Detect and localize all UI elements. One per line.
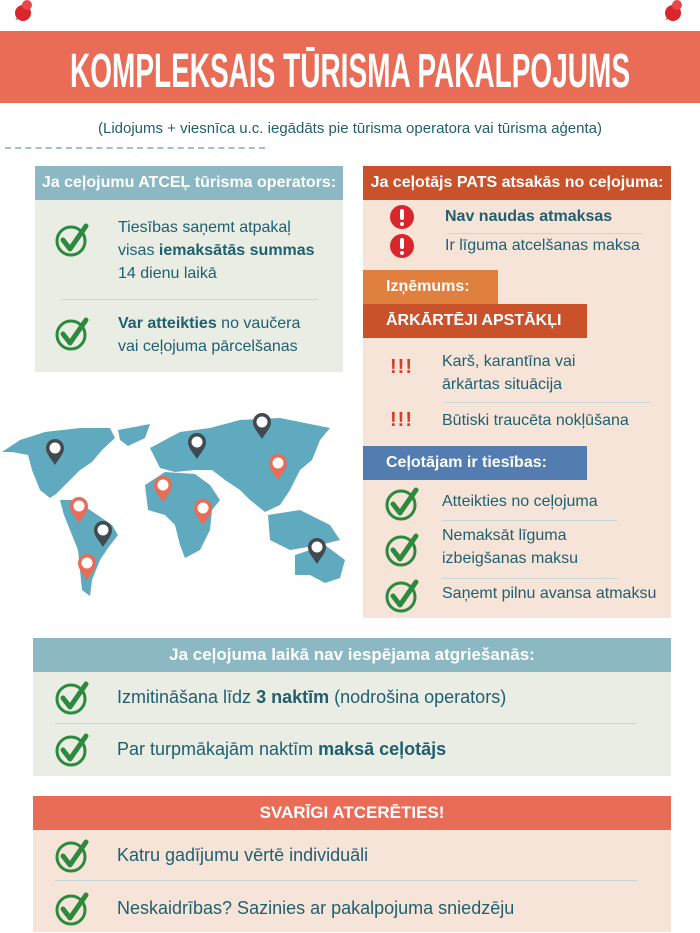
rights list: Atteikties no ceļojuma <box>442 493 598 510</box>
item: 3 nights <box>56 682 506 714</box>
item: no refund: Nav naudas atmaksas <box>445 208 612 225</box>
item: contact: Neskaidrības? Sazinies ar pakalpojuma sniedzēju <box>117 898 514 918</box>
item: no refund <box>390 205 612 229</box>
title banner <box>0 31 700 103</box>
item: war: Karš, karantīna vai <box>442 353 575 370</box>
icon: pushpin right <box>665 0 682 21</box>
item: refund: visas iemaksātās summas <box>118 242 315 259</box>
heading: Ja ceļojuma laikā nav iespējama atgriešanās: <box>169 645 535 664</box>
heading <box>33 796 671 830</box>
heading: SVARĪGI ATCERĒTIES! <box>260 803 444 822</box>
world map <box>2 413 345 596</box>
item: war: ārkārtas situācija <box>442 376 562 393</box>
panel: operator cancels <box>35 166 343 372</box>
item: voucher <box>56 315 300 355</box>
icon: pushpin left <box>15 0 32 21</box>
item: individual: Katru gadījumu vērtē individuāli <box>117 845 368 865</box>
label: extraordinary circumstances: ĀRKĀRTĒJI APSTĀKĻI <box>386 312 561 329</box>
item: war: !!! <box>390 356 413 378</box>
item: traveller pays: Par turpmākajām naktīm maksā ceļotājs <box>117 739 446 759</box>
heading: Ja ceļojumu ATCEĻ tūrisma operators: <box>42 174 336 191</box>
item: cancellation fee <box>390 234 640 258</box>
heading <box>363 166 671 200</box>
label: extraordinary circumstances <box>363 304 587 338</box>
item: travel disrupted <box>390 409 629 431</box>
heading <box>35 166 343 200</box>
item: refund: Tiesības saņemt atpakaļ <box>118 219 291 236</box>
label: rights <box>363 446 587 480</box>
panel: remember <box>33 796 671 932</box>
item: refund <box>56 219 315 282</box>
panel: return not possible <box>33 638 671 776</box>
item: individual <box>56 840 368 872</box>
item: travel disrupted: Būtiski traucēta nokļūšana <box>442 412 629 429</box>
panel: traveller cancels <box>363 166 671 618</box>
item: traveller pays <box>56 734 446 766</box>
item: travel disrupted: !!! <box>390 409 413 431</box>
rights list <box>386 488 656 612</box>
rights list: izbeigšanas maksu <box>442 550 578 567</box>
item: contact <box>56 892 514 926</box>
subtitle: (Lidojums + viesnīca u.c. iegādāts pie tūrisma operatora vai tūrisma aģenta) <box>98 120 602 137</box>
item: voucher: vai ceļojuma pārcelšanas <box>118 338 298 355</box>
item: cancellation fee: Ir līguma atcelšanas maksa <box>445 237 640 254</box>
item: refund: 14 dienu laikā <box>118 265 217 282</box>
heading <box>33 638 671 672</box>
heading: Ja ceļotājs PATS atsakās no ceļojuma: <box>371 174 663 191</box>
label: exception <box>363 270 498 304</box>
label: exception: Izņēmums: <box>386 278 470 295</box>
item: war <box>390 353 575 393</box>
label: rights: Ceļotājam ir tiesības: <box>386 454 547 471</box>
rights list: Saņemt pilnu avansa atmaksu <box>442 585 656 602</box>
item: voucher: Var atteikties no vaučera <box>118 315 300 332</box>
item: 3 nights: Izmitināšana līdz 3 naktīm (nodrošina operators) <box>117 687 506 707</box>
rights list: Nemaksāt līguma <box>442 527 566 544</box>
